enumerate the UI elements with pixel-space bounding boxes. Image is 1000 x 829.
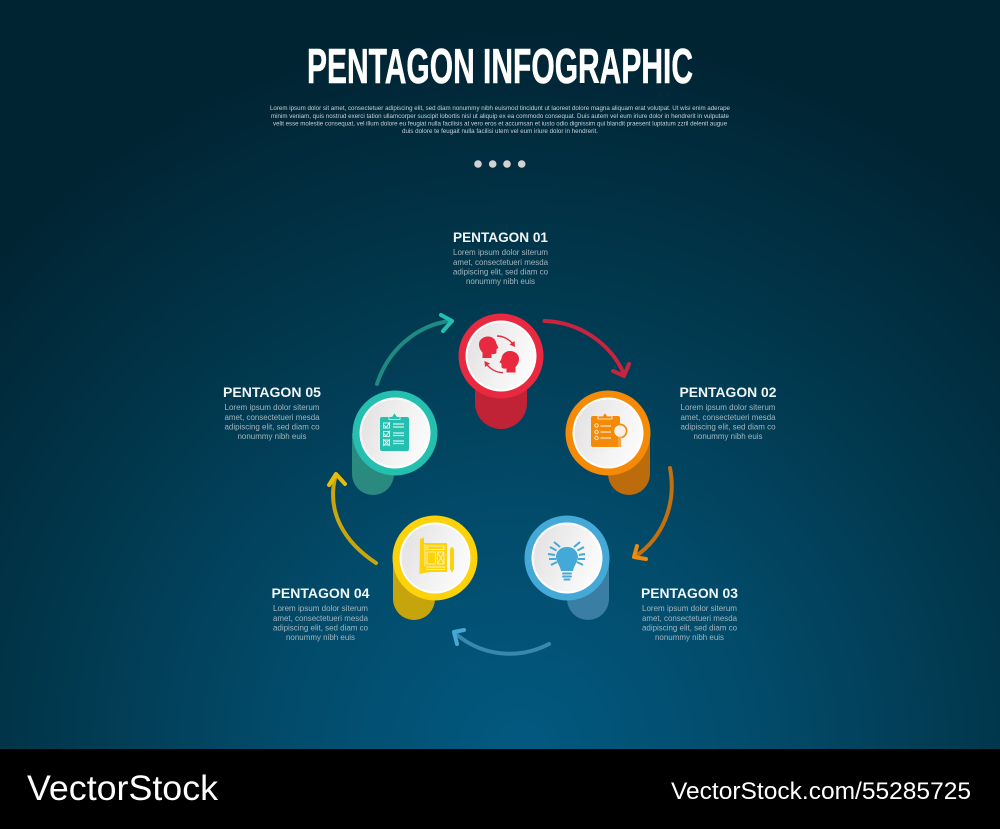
watermark logo: VectorStock xyxy=(27,769,219,808)
watermark bar xyxy=(0,749,1000,829)
arrow: 01 to 02 xyxy=(544,321,629,376)
intro text block: minim veniam, quis nostrud exerci tation ullamcorper suscipit lobortis nisl ut aliquip ex ea commodo consequat. Duis autem vel eum iriure dolor in hendrerit in vulputate xyxy=(271,114,730,120)
tail 05 xyxy=(352,433,394,495)
arrow: 02 to 03 xyxy=(634,468,672,559)
label: pentagon 05: nonummy nibh euis xyxy=(238,431,306,441)
label: pentagon 04 xyxy=(272,586,370,642)
icon: checklist clipboard xyxy=(380,412,409,451)
tail 04 xyxy=(393,558,435,620)
label: pentagon 05 xyxy=(223,385,321,441)
disc 04 xyxy=(400,522,470,594)
icon: two heads exchanging xyxy=(479,336,519,373)
disc 05 xyxy=(360,398,430,468)
node 01: red xyxy=(458,314,544,429)
label: pentagon 02: Lorem ipsum dolor siterum xyxy=(680,402,776,412)
node 03: blue xyxy=(524,516,610,620)
label: pentagon 03: adipiscing elit, sed diam co xyxy=(642,622,737,632)
intro text block: Lorem ipsum dolor sit amet, consectetuer adipiscing elit, sed diam nonummy nibh euismod tincidunt ut laoreet dolore magna aliquam erat volutpat. Ut wisi enim aderape xyxy=(270,106,731,112)
ring 02 xyxy=(566,390,650,476)
ring 04 xyxy=(392,516,478,600)
label: pentagon 01: adipiscing elit, sed diam co xyxy=(453,266,548,276)
label: pentagon 05: amet, consectetueri mesda xyxy=(224,412,320,422)
intro text block: velit esse molestie consequat, vel illum dolore eu feugiat nulla facilisis at vero eros et accumsan et iusto odio dignissim qui blandit praesent luptatum zzril delenit augue xyxy=(273,122,728,128)
watermark url: VectorStock.com/55285725 xyxy=(671,778,971,805)
label: pentagon 02: PENTAGON 02 xyxy=(680,385,776,400)
label: pentagon 02: nonummy nibh euis xyxy=(694,431,762,441)
icon: light bulb xyxy=(548,542,585,580)
label: pentagon 02: adipiscing elit, sed diam co xyxy=(680,422,776,432)
label: pentagon 04: Lorem ipsum dolor siterum xyxy=(273,603,368,613)
label: pentagon 02 xyxy=(680,385,776,441)
arrow: 03 to 04 xyxy=(454,630,549,654)
label: pentagon 05: PENTAGON 05 xyxy=(223,385,321,400)
label: pentagon 03: nonummy nibh euis xyxy=(655,632,724,642)
pagination dots xyxy=(474,160,526,168)
label: pentagon 03: PENTAGON 03 xyxy=(641,586,738,601)
label: pentagon 01: Lorem ipsum dolor siterum xyxy=(453,247,548,257)
label: pentagon 04: amet, consectetueri mesda xyxy=(273,613,368,623)
node 05: teal xyxy=(352,390,438,495)
label: pentagon 01: nonummy nibh euis xyxy=(466,276,535,286)
label: pentagon 05: adipiscing elit, sed diam co xyxy=(224,422,320,432)
node 04: yellow xyxy=(392,516,478,620)
tail 02 xyxy=(608,433,650,495)
disc 01 xyxy=(466,320,536,392)
label: pentagon 04: adipiscing elit, sed diam co xyxy=(273,622,368,632)
ring 03 xyxy=(524,516,610,600)
label: pentagon 04: nonummy nibh euis xyxy=(286,632,355,642)
label: pentagon 01: amet, consectetueri mesda xyxy=(453,257,548,267)
title: PENTAGON INFOGRAPHIC xyxy=(307,40,693,94)
icon: clipboard with magnifier xyxy=(591,412,628,447)
tail 03 xyxy=(567,558,609,620)
label: pentagon 05: Lorem ipsum dolor siterum xyxy=(224,402,320,412)
label: pentagon 04: PENTAGON 04 xyxy=(272,586,370,601)
intro text block xyxy=(270,106,731,135)
arrow: 04 to 05 xyxy=(329,474,376,563)
label: pentagon 01: PENTAGON 01 xyxy=(453,230,548,245)
tail 01 xyxy=(475,356,527,429)
label: pentagon 02: amet, consectetueri mesda xyxy=(680,412,776,422)
arrow: 05 to 01 xyxy=(377,315,452,384)
node 02: orange xyxy=(566,390,650,495)
icon: blueprint and pencil xyxy=(420,538,454,574)
label: pentagon 01 xyxy=(453,230,548,286)
label: pentagon 03: amet, consectetueri mesda xyxy=(642,613,737,623)
intro text block: duis dolore te feugait nulla facilisi utem vel eum iriure dolor in hendrerit. xyxy=(402,129,598,135)
label: pentagon 03 xyxy=(641,586,738,642)
label: pentagon 03: Lorem ipsum dolor siterum xyxy=(642,603,737,613)
ring 05 xyxy=(352,390,438,476)
disc 02 xyxy=(572,398,644,468)
ring 01 xyxy=(458,314,544,398)
disc 03 xyxy=(532,522,602,594)
